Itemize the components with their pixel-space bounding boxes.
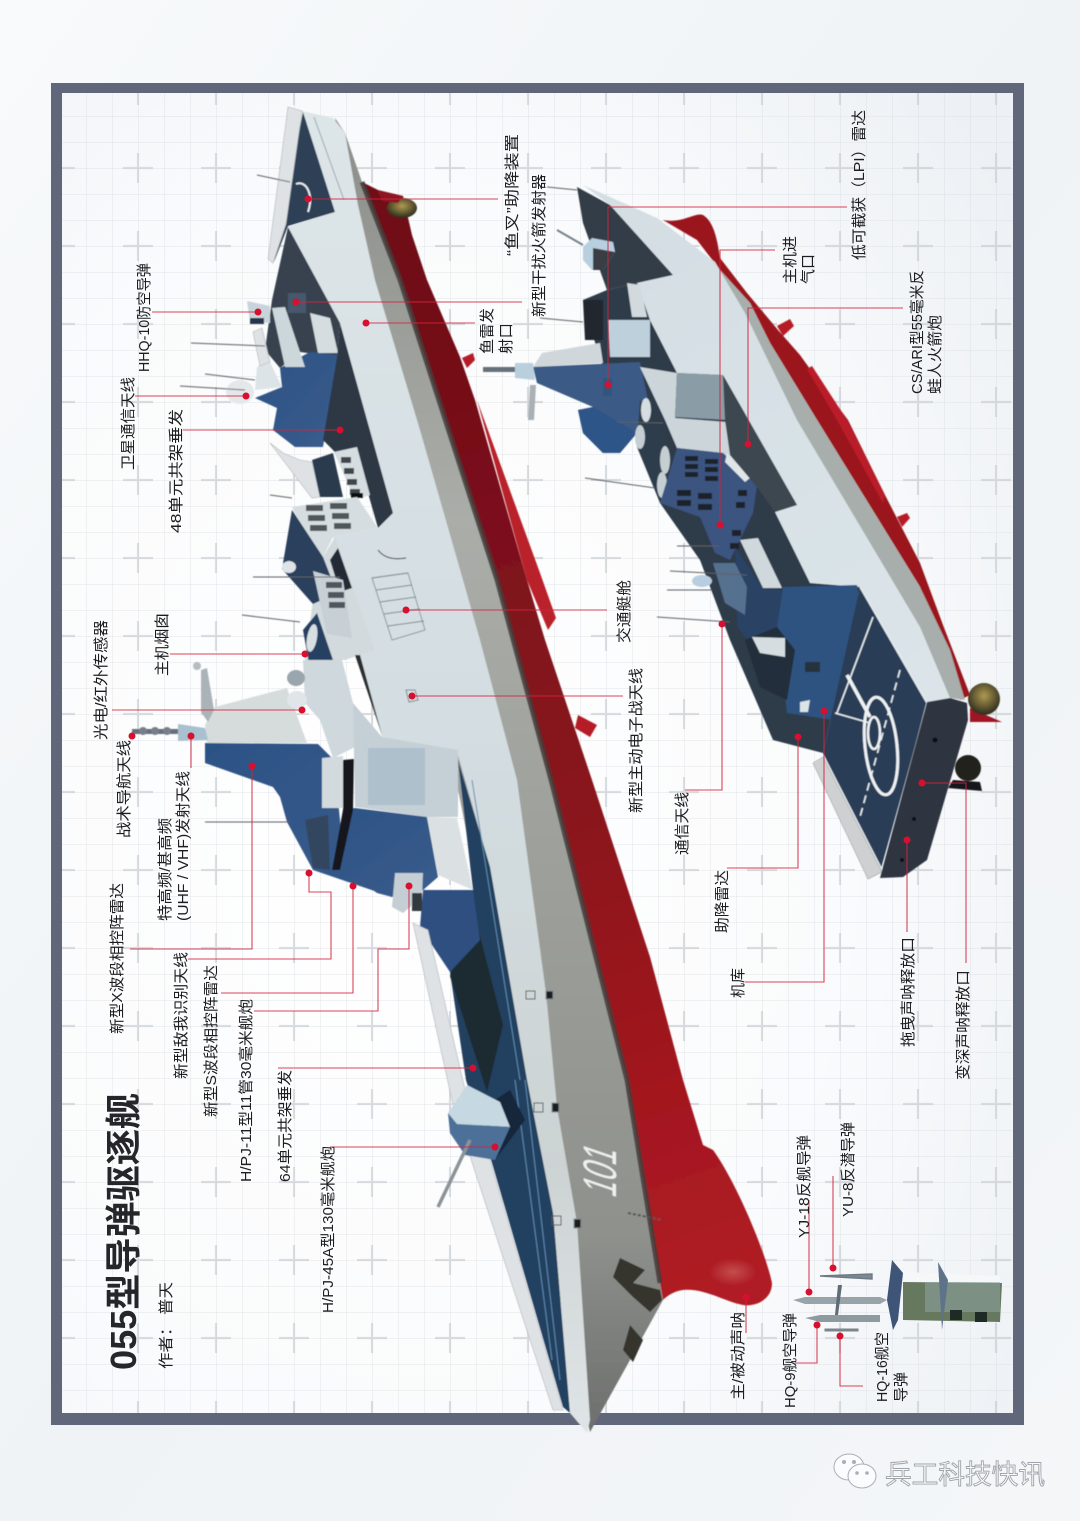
callout: hangar: 机库 — [730, 968, 747, 998]
callout: hangar — [730, 708, 828, 998]
callout: fish fork landing device — [304, 134, 521, 256]
callout: UHF/VHF antenna — [157, 732, 194, 921]
mast and sensor spine — [132, 662, 214, 741]
forward blocks and CIWS — [392, 873, 480, 972]
deck hatches and marks — [372, 573, 662, 1228]
anchors — [613, 1258, 662, 1362]
callout: 64-cell VLS: 64单元共架垂发 — [277, 1070, 294, 1182]
callout: HQ-9: HQ-9舰空导弹 — [782, 1313, 799, 1408]
callout: S-band radar: 新型S波段相控阵雷达 — [203, 965, 220, 1117]
forward VLS block — [723, 375, 797, 512]
hangar — [745, 585, 860, 720]
callout: landing aid radar: 助降雷达 — [714, 870, 731, 933]
callout: anti-frogman rocket launcher: 蛙人火箭炮 — [926, 315, 944, 394]
aft superstructure — [226, 227, 343, 498]
missile displays — [793, 1260, 1002, 1331]
callout: 30mm CIWS: H/PJ-11型11管30毫米舰炮 — [237, 999, 255, 1182]
transom — [880, 698, 968, 878]
grey hull side — [650, 217, 965, 700]
watermark: WeChat logo and account name — [834, 1454, 1045, 1490]
propeller and rudder — [377, 190, 417, 218]
bridge superstructure — [205, 655, 473, 897]
midship funnels — [282, 497, 425, 669]
callout: main engine intake: 主机进 — [782, 236, 799, 284]
callout: torpedo port: 鱼雷发 — [478, 308, 496, 354]
callout: HQ-16: HQ-16舰空 — [874, 1332, 891, 1402]
antennas — [540, 187, 747, 622]
callout: utility boat bay — [402, 580, 633, 643]
callout: EO/IR sensor — [93, 620, 306, 740]
callout: decoy launcher — [292, 174, 548, 317]
callout: 64-cell VLS — [277, 1064, 476, 1182]
callout: YU-8 — [830, 1122, 857, 1272]
callout: anti-frogman rocket launcher — [744, 270, 944, 448]
watermark: WeChat logo and account name: 兵工科技快讯 — [885, 1460, 1045, 1490]
callout: HQ-16 — [836, 1332, 910, 1402]
callout: variable depth sonar port — [918, 780, 972, 1080]
flight deck with landing circle — [823, 587, 927, 872]
callout: funnel — [154, 613, 308, 676]
HQ-9 missile — [805, 1315, 880, 1322]
callout: HHQ-10: HHQ-10防空导弹 — [136, 263, 153, 372]
red lower hull with sonar bulb — [362, 182, 772, 1305]
callout: HQ-16: 导弹 — [893, 1372, 910, 1402]
callout: bow sonar — [729, 1294, 750, 1400]
main ship: port view of Type 055 — [132, 107, 772, 1433]
frame with blueprint grid — [51, 83, 1024, 1425]
callout: main engine intake: 气口 — [800, 254, 817, 284]
callout: main engine intake — [716, 236, 817, 528]
funnels and windows block — [635, 367, 757, 560]
callout: LPI radar — [604, 110, 868, 388]
callout: X-band radar: 新型X波段相控阵雷达 — [109, 883, 126, 1034]
callout: IFF antenna: 新型敌我识别天线 — [173, 952, 190, 1079]
callout: 48-cell VLS — [168, 409, 344, 533]
small stabiliser fins — [462, 353, 597, 737]
130mm main gun — [438, 1085, 525, 1207]
callout: satcom antenna — [120, 377, 250, 470]
callout: S-band radar — [203, 882, 356, 1117]
callout: UHF/VHF antenna: 特高频/甚高频 — [157, 818, 174, 921]
forward deck lattice and 64-cell VLS — [450, 760, 570, 1413]
callout: anti-frogman rocket launcher: CS/ARI型55毫米反 — [908, 270, 926, 394]
propellers — [948, 683, 1000, 791]
callout: funnel: 主机烟囱 — [154, 613, 171, 676]
callout: LPI radar: 低可截获（LPI）雷达 — [851, 110, 868, 260]
callout: satcom antenna: 卫星通信天线 — [120, 377, 137, 470]
HQ-16 missile — [825, 1329, 858, 1331]
callout: YJ-18: YJ-18反舰导弹 — [796, 1135, 813, 1238]
callout: YU-8: YU-8反潜导弹 — [840, 1122, 857, 1217]
antennas — [180, 175, 340, 822]
callout: UHF/VHF antenna: (UHF / VHF)发射天线 — [175, 771, 192, 921]
grey hull side — [335, 118, 663, 1432]
bridge tower — [483, 320, 650, 453]
hull number: 101 — [574, 1137, 627, 1203]
callout: EO/IR sensor: 光电/红外传感器 — [93, 620, 110, 740]
title: 055型导弹驱逐舰 — [103, 1093, 144, 1370]
callout: tactical navigation antenna: 战术导航天线 — [116, 740, 133, 838]
superstructure backing — [583, 283, 860, 753]
callout: electronic warfare antenna: 新型主动电子战天线 — [628, 668, 645, 813]
red lower hull — [663, 215, 1002, 722]
forward mounts — [583, 283, 647, 340]
callout: torpedo port: 射口 — [498, 323, 515, 354]
callout: communications antenna: 通信天线 — [674, 792, 691, 855]
second ship: starboard stern view — [483, 185, 1002, 879]
net under flight deck — [813, 757, 882, 879]
callout: 48-cell VLS: 48单元共架垂发 — [168, 409, 185, 533]
main deck — [288, 111, 590, 1433]
deck — [583, 185, 950, 703]
YJ-18 missile — [793, 1285, 887, 1315]
icon: WeChat bubbles — [834, 1454, 876, 1488]
callout: torpedo port — [362, 308, 515, 354]
aft superstructure — [692, 538, 782, 647]
YU-8 missile — [820, 1274, 872, 1279]
callout: X-band radar — [109, 762, 256, 1034]
callout: communications antenna — [674, 620, 726, 855]
callout: electronic warfare antenna — [408, 668, 645, 813]
callout: 30mm CIWS — [237, 882, 412, 1182]
bow foredeck — [577, 187, 673, 290]
callout: decoy launcher: 新型干扰火箭发射器 — [530, 174, 548, 317]
callout: HQ-9 — [782, 1313, 820, 1408]
stern flight deck — [268, 107, 344, 263]
callout: 130mm gun: H/PJ-45A型130毫米舰炮 — [319, 1146, 337, 1313]
dark boot-top line — [362, 182, 660, 1283]
callout: fish fork landing device: “鱼叉”助降装置 — [503, 134, 521, 256]
48-cell VLS — [323, 323, 393, 528]
callout: YJ-18 — [796, 1135, 813, 1296]
callout: landing aid radar — [714, 734, 802, 933]
callout: HHQ-10 — [136, 263, 262, 372]
callout: variable depth sonar port: 变深声呐释放口 — [954, 970, 972, 1080]
callout: IFF antenna — [173, 870, 331, 1079]
callout: 130mm gun — [319, 1144, 498, 1313]
callout: utility boat bay: 交通艇舱 — [615, 580, 633, 643]
gun turret — [557, 230, 615, 270]
callout: towed sonar port: 拖曳声呐释放口 — [899, 937, 917, 1047]
vertical launch cells — [887, 1260, 1002, 1330]
author: 作者： 普天 — [158, 1282, 175, 1369]
guard-rail net along bow — [413, 923, 563, 1410]
callout: bow sonar: 主/被动声呐 — [729, 1312, 747, 1400]
callout: towed sonar port — [899, 836, 917, 1047]
